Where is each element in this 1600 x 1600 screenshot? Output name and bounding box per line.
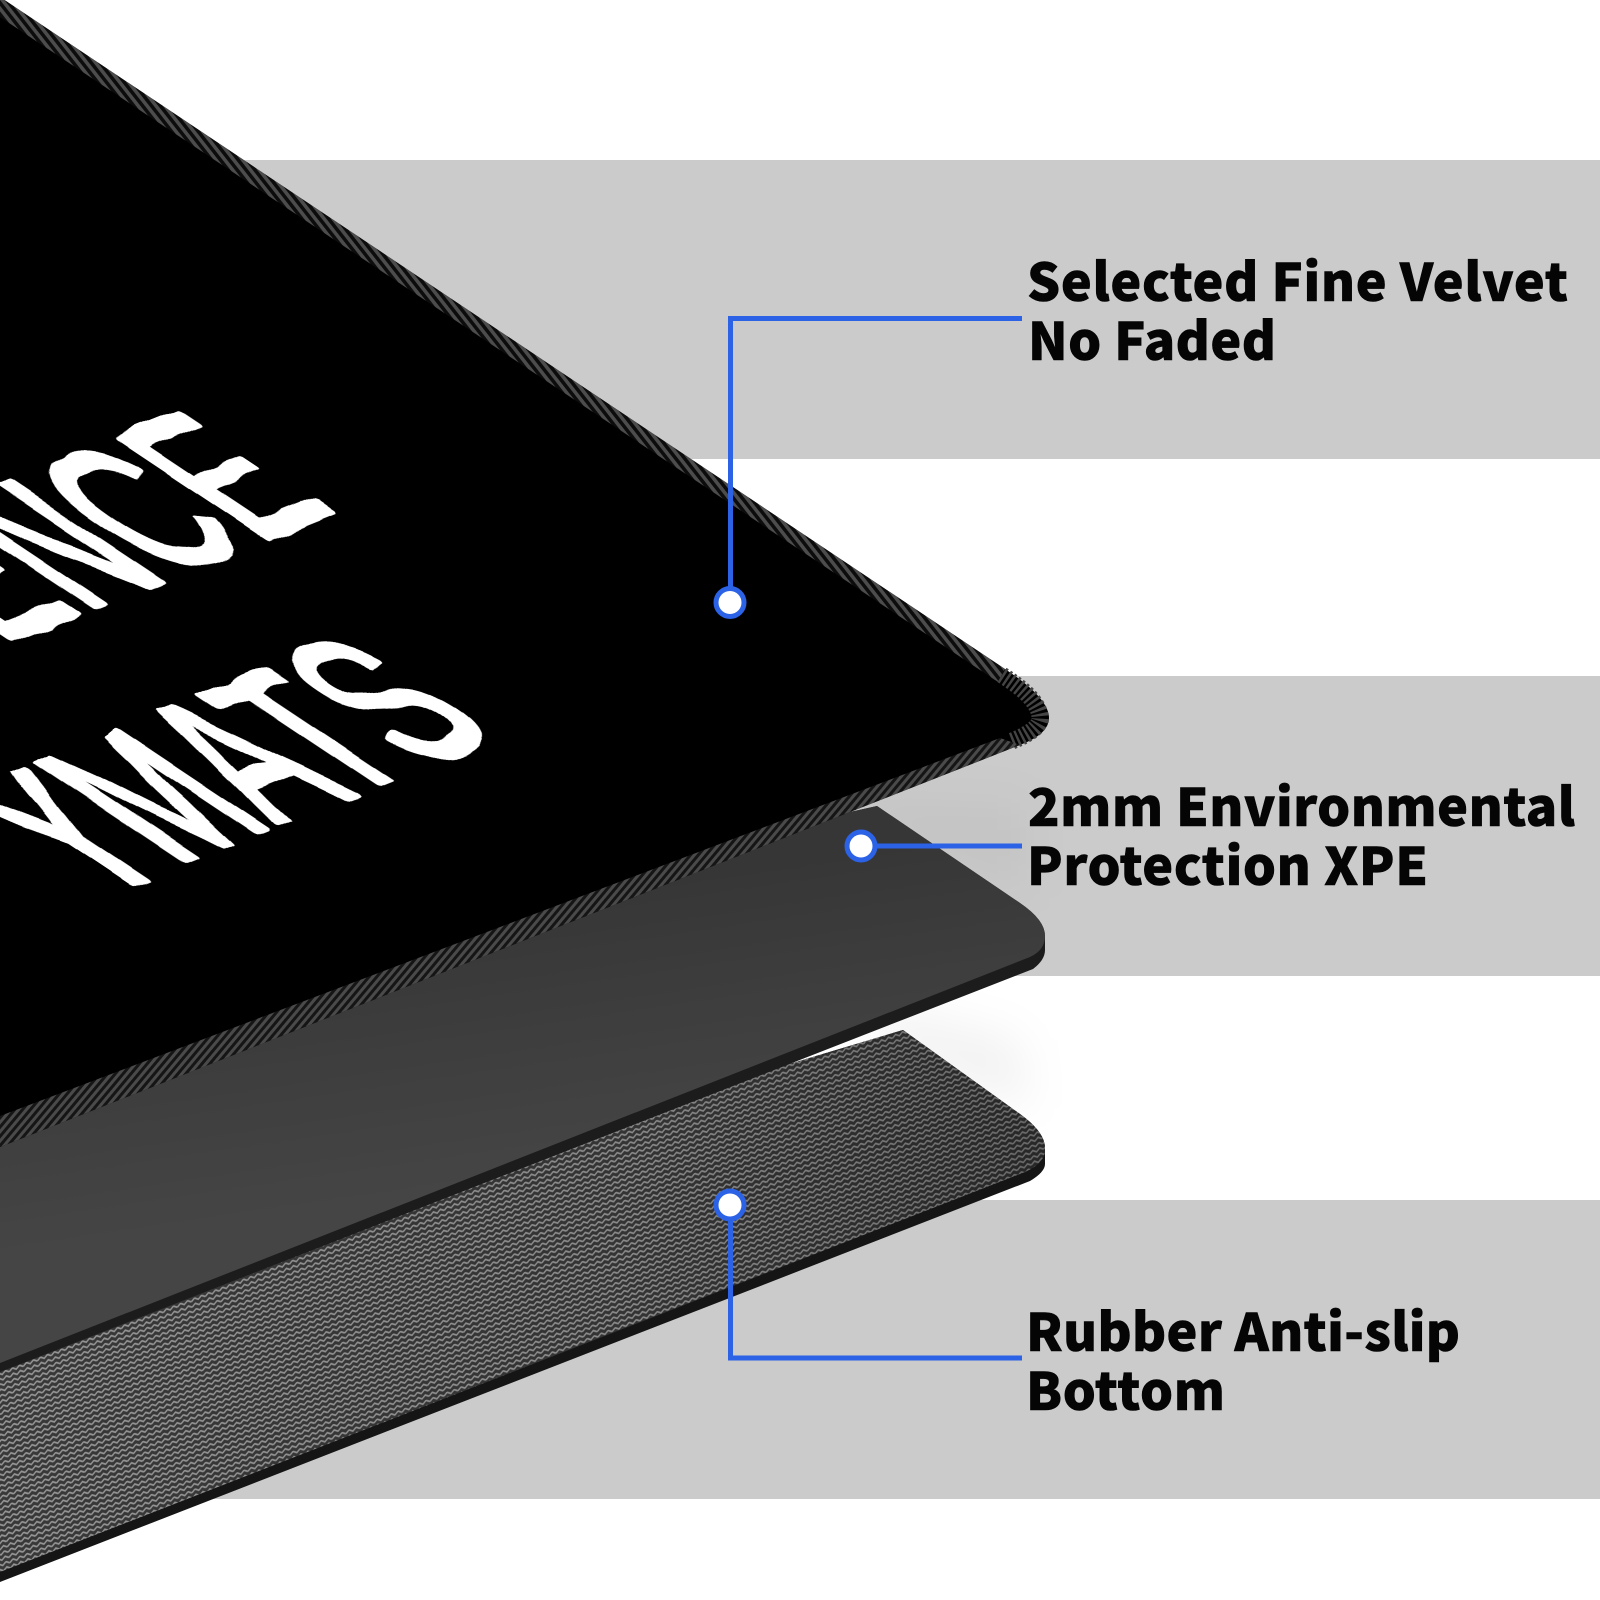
leader line bbox=[730, 1212, 1022, 1358]
corner stitching bbox=[1002, 675, 1040, 741]
label text: Bottom bbox=[1026, 1350, 1225, 1425]
label text: Protection XPE bbox=[1027, 825, 1428, 900]
bottom edge stitching bbox=[0, 738, 1020, 1147]
label text: Selected Fine Velvet bbox=[1027, 241, 1568, 316]
leader line bbox=[861, 844, 1022, 848]
layer: XPE foam middle bbox=[0, 806, 1045, 1372]
label text: Rubber Anti-slip bbox=[1026, 1291, 1460, 1366]
top edge stitching bbox=[0, 0, 1005, 682]
rubber edge thickness bbox=[0, 1030, 1045, 1582]
label text: No Faded bbox=[1028, 300, 1276, 375]
soft shadows behind layers bbox=[908, 1028, 1008, 1083]
layer: rubber anti-slip bottom bbox=[0, 1030, 1045, 1582]
foam face bbox=[0, 806, 1045, 1363]
label text: 2mm Environmental bbox=[1028, 766, 1575, 841]
foam edge thickness bbox=[0, 806, 1045, 1372]
label text bbox=[1026, 1291, 1460, 1425]
label text bbox=[1027, 766, 1575, 900]
callout: rubber anti-slip bbox=[716, 1191, 1460, 1425]
marker dot bbox=[716, 588, 744, 616]
leader line bbox=[730, 318, 1022, 595]
marker dot bbox=[847, 832, 875, 860]
rubber woven face bbox=[0, 1030, 1045, 1572]
velvet black surface bbox=[0, 0, 1049, 1147]
layer: fine velvet top mat bbox=[0, 0, 1049, 1147]
grey band: top bbox=[0, 160, 1600, 459]
grey band: middle bbox=[0, 676, 1600, 976]
marker dot bbox=[716, 1191, 744, 1219]
callout: selected fine velvet bbox=[716, 241, 1568, 616]
grey band: bottom bbox=[0, 1200, 1600, 1499]
label text bbox=[1027, 241, 1568, 375]
rubber face shading bbox=[0, 1030, 1045, 1572]
callout: XPE protection bbox=[847, 766, 1575, 900]
